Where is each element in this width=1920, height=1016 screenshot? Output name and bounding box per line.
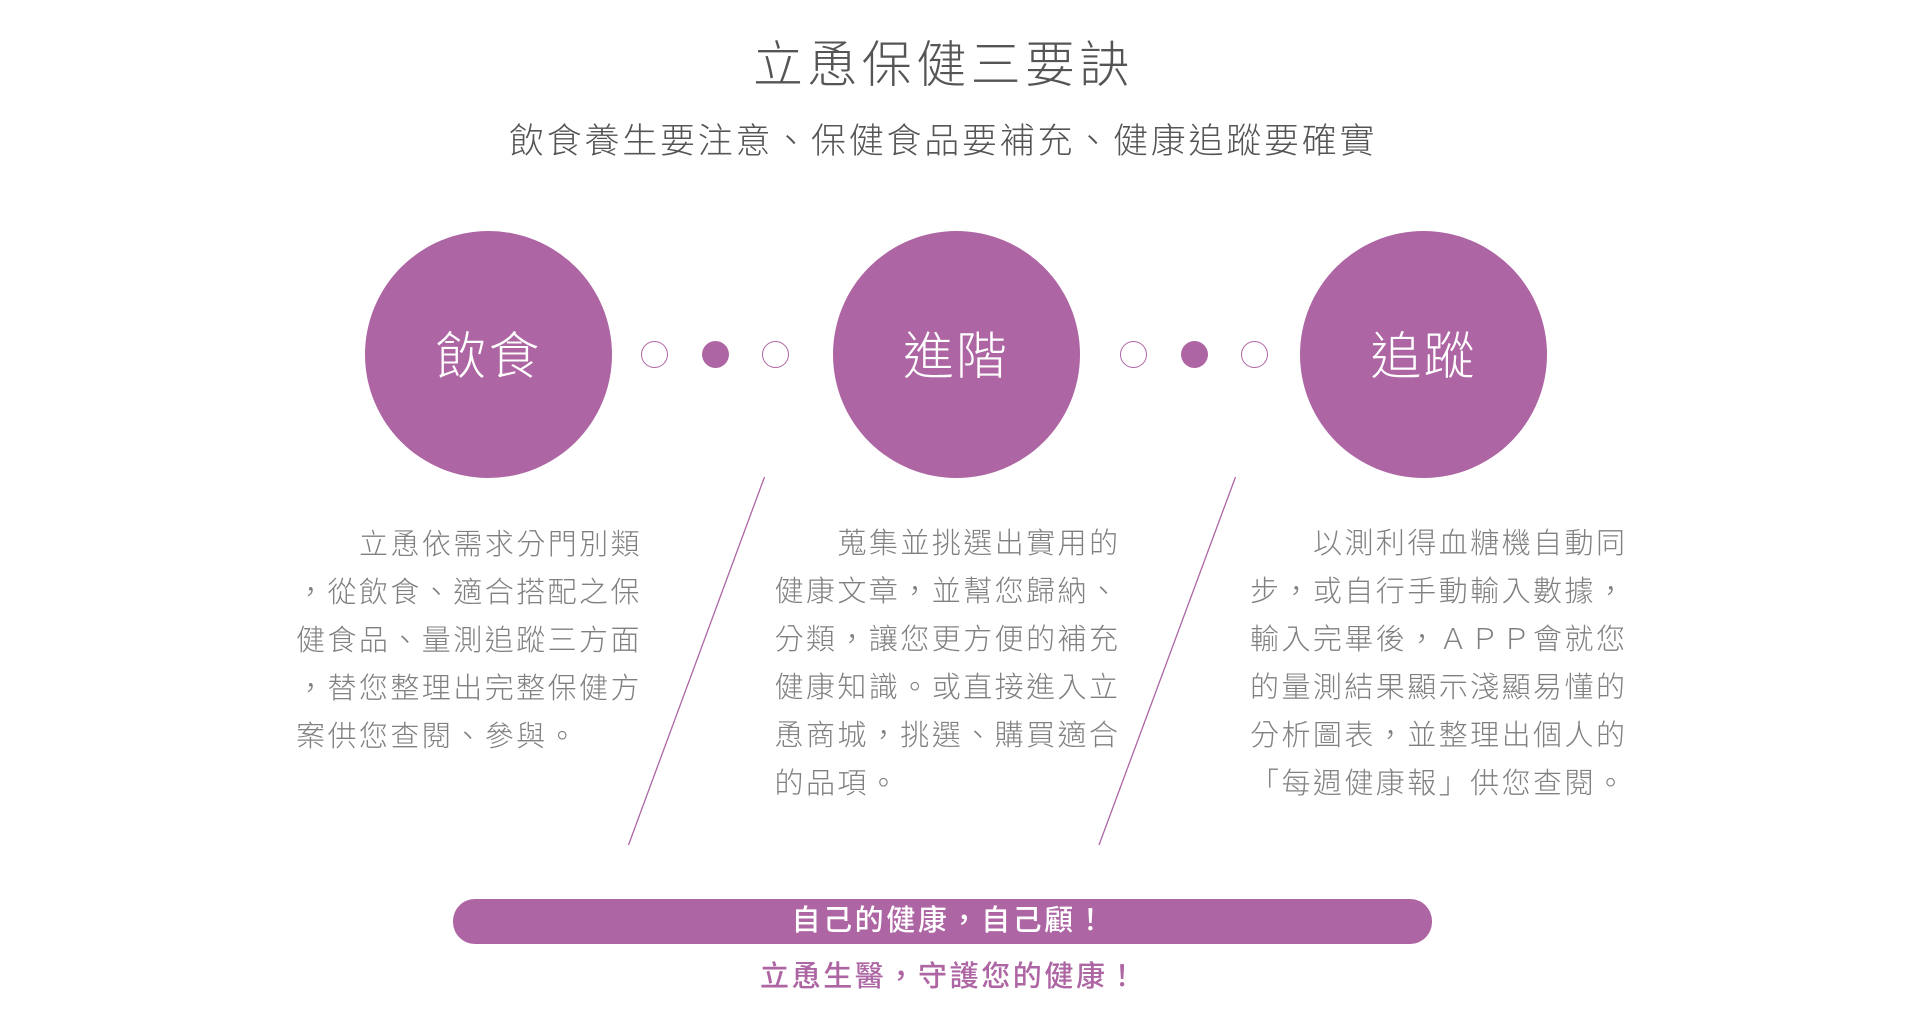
- circle: diet: [365, 231, 612, 478]
- text block: diet: 案供您查閱、參與。: [296, 720, 579, 752]
- text block: advanced: 恿商城，挑選、購買適合: [774, 720, 1120, 752]
- circle: advanced: [832, 231, 1080, 478]
- title: 立恿保健三要訣: [753, 37, 1134, 93]
- text block: tracking: 以測利得血糖機自動同: [1313, 528, 1628, 560]
- text block: tracking: 輸入完畢後，ＡＰＰ會就您: [1250, 624, 1627, 656]
- circle: diet: 飲食: [435, 328, 542, 385]
- slogan banner: 自己的健康，自己顧！: [791, 905, 1108, 937]
- text block: advanced: 的品項。: [774, 768, 900, 800]
- slogan banner: [453, 899, 1432, 944]
- text block: advanced: 健康知識。或直接進入立: [774, 672, 1120, 704]
- circle: tracking: 追蹤: [1370, 328, 1476, 385]
- text block: tracking: 的量測結果顯示淺顯易懂的: [1250, 672, 1627, 704]
- closing slogan: 立恿生醫，守護您的健康！: [760, 961, 1139, 993]
- text block: diet: ，從飲食、適合搭配之保: [296, 576, 642, 608]
- text block: advanced: [774, 528, 1121, 800]
- text block: tracking: 「每週健康報」供您查閱。: [1250, 768, 1627, 800]
- text block: advanced: 健康文章，並幫您歸納、: [774, 576, 1120, 608]
- text block: diet: 立恿依需求分門別類: [359, 528, 642, 560]
- text block: diet: ，替您整理出完整保健方: [296, 672, 642, 704]
- circle: tracking: [1300, 231, 1547, 478]
- text block: advanced: 分類，讓您更方便的補充: [774, 624, 1120, 656]
- text block: tracking: [1250, 528, 1628, 800]
- connector dots: first: [641, 341, 789, 368]
- text block: diet: [296, 528, 642, 752]
- text block: tracking: 分析圖表，並整理出個人的: [1250, 720, 1627, 752]
- text block: advanced: 蒐集並挑選出實用的: [838, 528, 1121, 560]
- text block: diet: 健食品、量測追蹤三方面: [296, 624, 642, 656]
- text block: tracking: 步，或自行手動輸入數據，: [1250, 576, 1627, 608]
- subtitle: 飲食養生要注意、保健食品要補充、健康追蹤要確實: [509, 122, 1377, 161]
- circle: advanced: 進階: [903, 328, 1009, 385]
- connector dots: second: [1120, 341, 1268, 368]
